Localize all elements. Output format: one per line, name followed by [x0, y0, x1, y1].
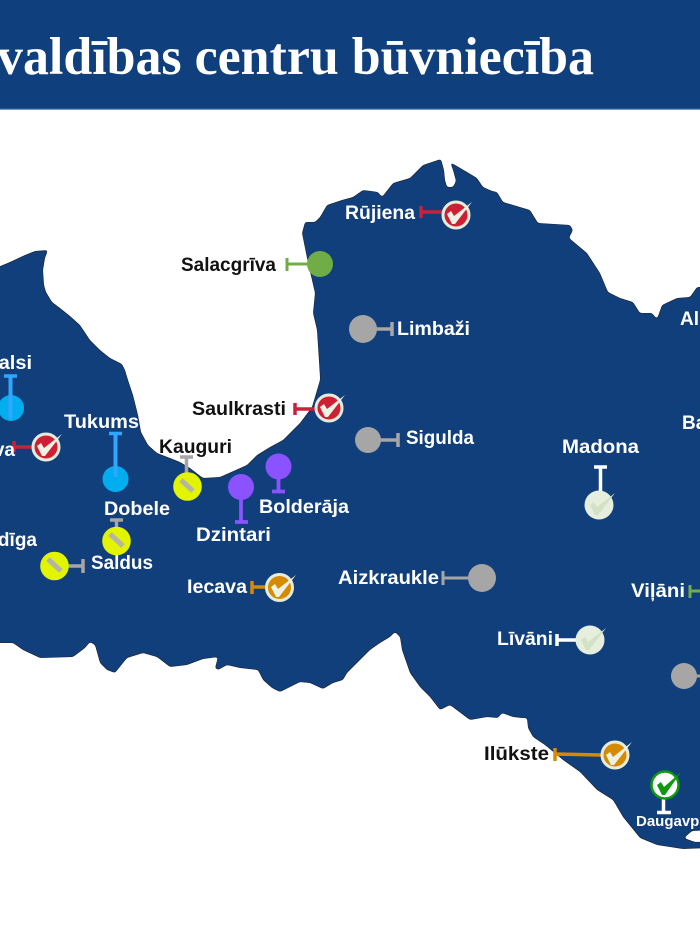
- marker: Ilūkste, orange check: [555, 742, 632, 768]
- label: Limbaži: Limbaži: [397, 319, 470, 340]
- label: Rūjiena: Rūjiena: [345, 203, 415, 224]
- marker: Dzintari, purple: [228, 474, 254, 522]
- label: Madona: Madona: [562, 437, 639, 458]
- label: Aizkraukle: Aizkraukle: [338, 568, 439, 589]
- label: Saldus: Saldus: [91, 553, 153, 574]
- map of Latvia: [0, 159, 700, 849]
- marker: Dobele, yellow pencil: [102, 520, 131, 555]
- label: Tukums: Tukums: [64, 412, 139, 433]
- marker: Tukums, blue: [102, 433, 128, 492]
- marker: Limbaži, grey: [349, 315, 392, 343]
- label: Ilūkste: Ilūkste: [484, 744, 549, 765]
- label: Saulkrasti: Saulkrasti: [192, 399, 286, 420]
- marker: Rūjiena, red check: [421, 202, 472, 228]
- marker: Talsi, blue: [0, 376, 24, 421]
- label: Kauguri: Kauguri: [159, 437, 232, 458]
- label: Iecava: Iecava: [187, 577, 247, 598]
- marker: Iecava, orange check: [252, 574, 296, 600]
- label: Līvāni: Līvāni: [497, 629, 553, 650]
- header banner: [0, 0, 700, 110]
- marker: Rēzekne area, grey: [671, 663, 700, 689]
- marker: Sigulda, grey: [355, 427, 398, 453]
- marker: Bolderāja, purple: [266, 454, 292, 492]
- label: Viļāni: Viļāni: [631, 581, 685, 602]
- marker: Kandava, red check: [14, 434, 62, 460]
- label: Sigulda: Sigulda: [406, 428, 474, 449]
- marker: Madona, white check: [584, 467, 615, 520]
- label: Dobele: Dobele: [104, 499, 170, 520]
- marker: Saulkrasti, red check: [295, 395, 345, 421]
- marker: Viļāni, green: [690, 585, 700, 598]
- marker: Daugavpils, green check: [652, 772, 681, 812]
- marker: Salacgrīva, green: [287, 251, 333, 277]
- marker: Saldus, yellow pencil: [40, 552, 83, 580]
- title: valdības centru būvniecība: [0, 28, 594, 86]
- label: Bolderāja: Bolderāja: [259, 497, 349, 518]
- label: Salacgrīva: Salacgrīva: [181, 255, 276, 276]
- marker: Kauguri, yellow pencil: [173, 457, 202, 501]
- marker: Līvāni, white check: [557, 626, 606, 654]
- marker: Aizkraukle, grey: [443, 564, 496, 592]
- label: Dzintari: Dzintari: [196, 525, 271, 546]
